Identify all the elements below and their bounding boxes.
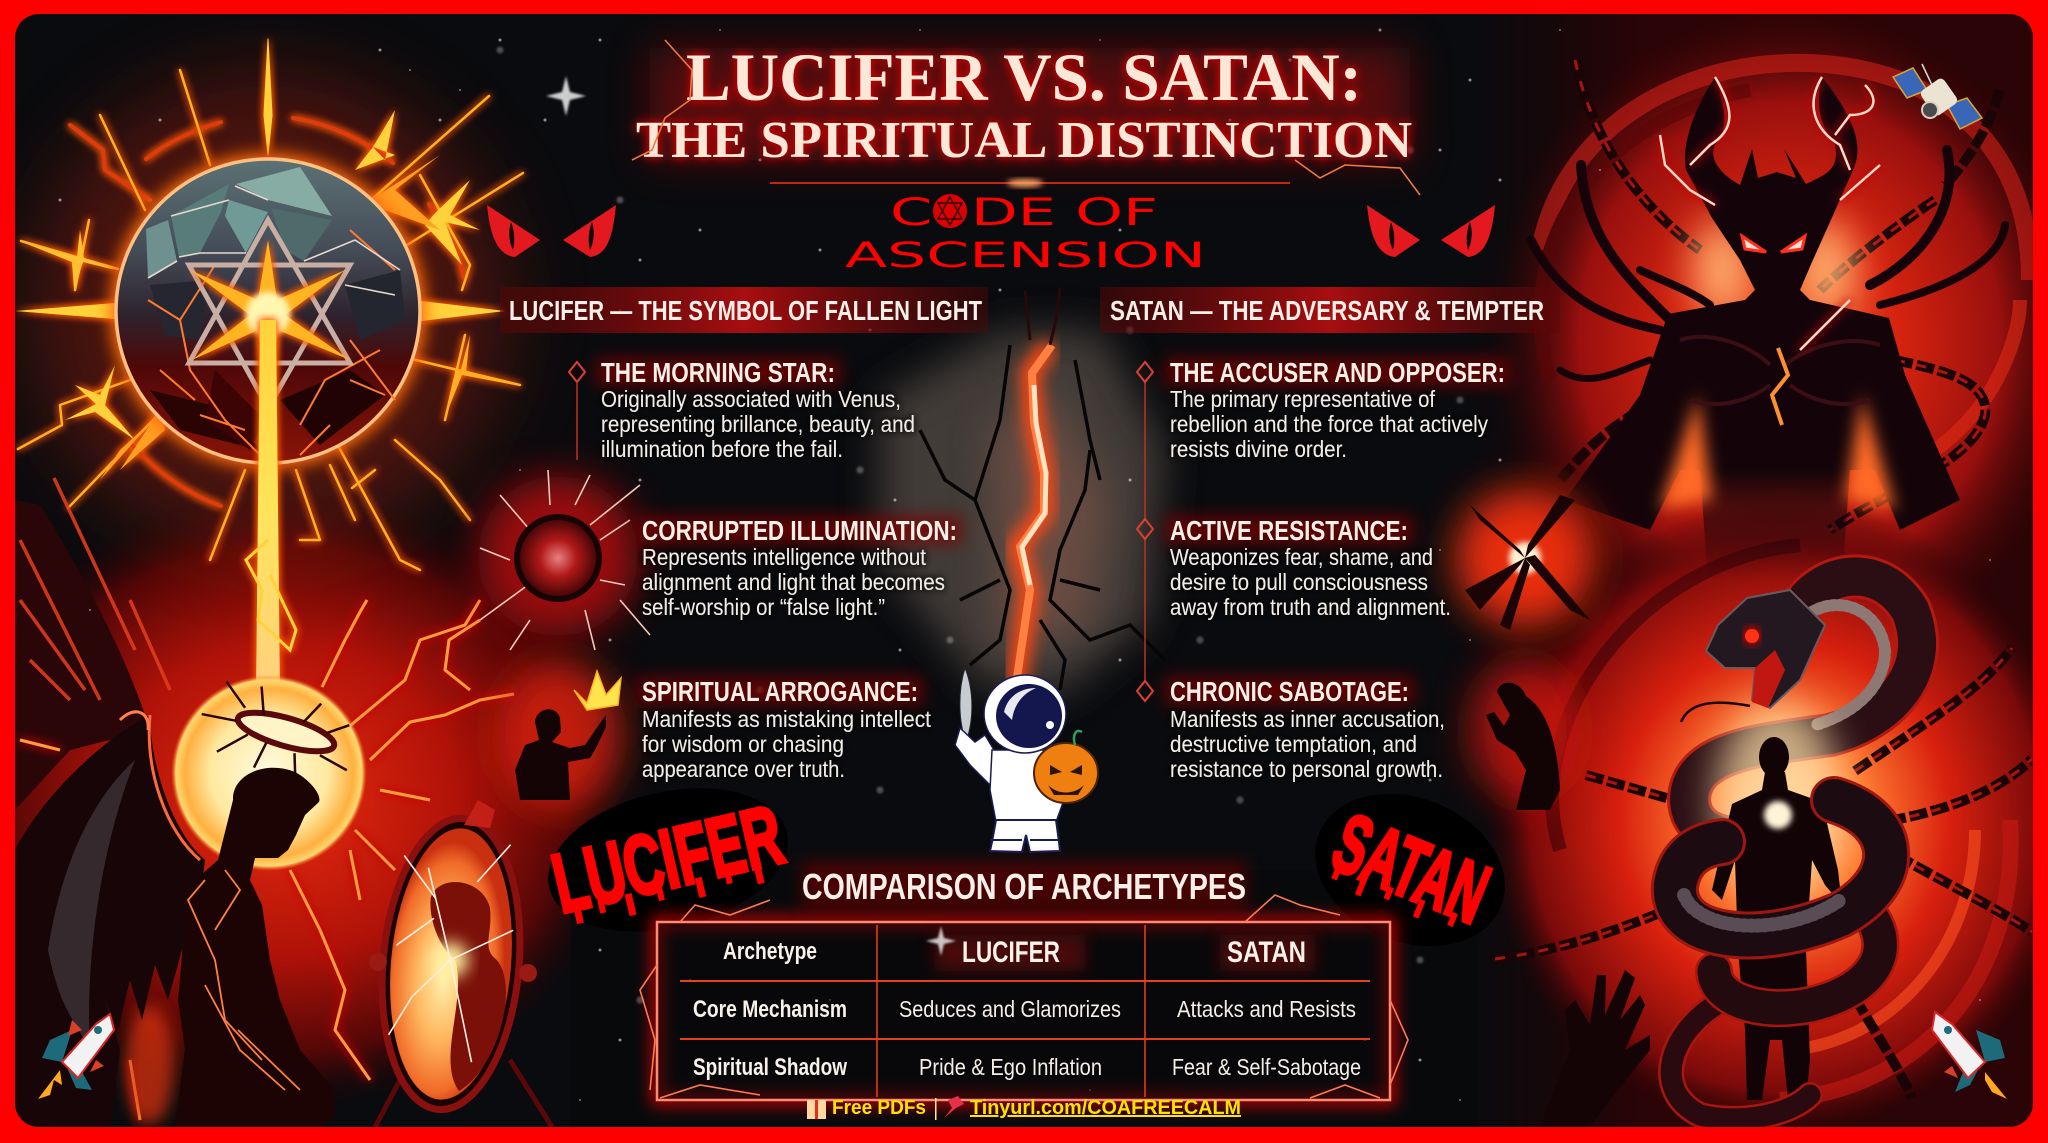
item: chronic sabotage: resistance to personal growth. (1170, 756, 1443, 782)
icon: left devil eyes (487, 205, 616, 257)
footer link: Tinyurl.com/COAFREECALM (970, 1097, 1241, 1119)
panel: lucifer column (500, 287, 988, 782)
icon: glowing halo (171, 675, 367, 871)
item: morning star: Originally associated with Venus, (601, 386, 901, 412)
item: active resistance: ACTIVE RESISTANCE: (1170, 515, 1408, 546)
icon: satellite (1893, 64, 1982, 129)
item: morning star: representing brillance, beauty, and (601, 411, 915, 437)
sticker: satan (1292, 767, 1528, 973)
item: morning star (596, 357, 915, 462)
row: spiritual shadow (693, 1054, 1361, 1081)
icon: golden crown (574, 671, 621, 710)
lower centre dark panel (571, 870, 1477, 1127)
icon: grieving woman silhouette (1470, 658, 1580, 810)
icon: right devil eyes (1367, 205, 1495, 257)
item: morning star: THE MORNING STAR: (601, 357, 835, 388)
icon: angel silhouette (175, 768, 335, 1127)
icon: cracked planet with hexagram (110, 153, 426, 469)
row: header (723, 936, 1306, 969)
icon: radiating lightning (20, 600, 514, 1120)
satan heading bar (1100, 287, 1560, 333)
icon: corrupted illumination orb (478, 470, 650, 650)
icon: starburst (1455, 488, 1595, 630)
row: spiritual shadow: Fear & Self-Sabotage (1172, 1054, 1361, 1080)
row: header: SATAN (1227, 936, 1306, 969)
row: header: LUCIFER (962, 936, 1060, 969)
footer link: Free PDFs (832, 1097, 926, 1119)
item: accuser and opposer: resists divine order. (1170, 436, 1347, 462)
row: header: Archetype (723, 938, 817, 965)
sticker: lucifer: LUCIFER (544, 787, 791, 931)
item: active resistance: Weaponizes fear, shame, and (1170, 544, 1433, 570)
item: active resistance: away from truth and alignment. (1170, 594, 1451, 620)
central stone texture and crack (880, 288, 1165, 695)
icon: diamond marker (569, 362, 585, 460)
icon: title lightning right (1295, 160, 1420, 195)
icon: crown of thorns (201, 681, 350, 773)
icon: demon tendrils (1531, 150, 2005, 379)
item: corrupted illumination: alignment and light that becomes (642, 569, 945, 595)
row: core mechanism: Attacks and Resists (1177, 996, 1356, 1022)
item: spiritual arrogance: SPIRITUAL ARROGANCE: (642, 676, 918, 707)
item: chronic sabotage: CHRONIC SABOTAGE: (1170, 676, 1409, 707)
item: corrupted illumination: Represents intelligence without (642, 544, 927, 570)
icon: jack-o-lantern (1034, 731, 1098, 803)
row: core mechanism: Core Mechanism (693, 996, 847, 1023)
icon: angel wing (15, 712, 205, 1127)
icon: cracked mirror (369, 800, 552, 1127)
item: chronic sabotage: destructive temptation, and (1170, 731, 1417, 757)
logo: code of ascension: C DE OF (890, 191, 1158, 234)
icon: vertical light beam (246, 320, 296, 700)
item: accuser and opposer: rebellion and the force that actively (1170, 411, 1488, 437)
table: comparison (640, 895, 1408, 1100)
left artwork: fallen light (0, 39, 650, 1127)
item: accuser and opposer (1165, 357, 1510, 462)
item: corrupted illumination: self-worship or “false light.” (642, 594, 885, 620)
icon: hexagram (189, 220, 350, 408)
item: spiritual arrogance: appearance over truth. (642, 756, 845, 782)
icon: man reaching for crown (498, 660, 622, 810)
item: corrupted illumination (637, 515, 962, 620)
icon: serpent head (1681, 590, 1825, 722)
panel: satan column (1100, 287, 1560, 782)
icon: reaching hand silhouette (1565, 970, 1650, 1127)
item: chronic sabotage (1165, 676, 1445, 782)
icon: swirl arcs (1540, 63, 2030, 1100)
right artwork: adversary (1455, 0, 2048, 1140)
row: spiritual shadow: Pride & Ego Inflation (919, 1054, 1102, 1080)
sticker: lucifer (534, 766, 802, 954)
item: active resistance (1165, 515, 1451, 620)
icon: pin (944, 1096, 964, 1118)
icon: right rocket (1932, 1012, 2007, 1099)
item: active resistance: desire to pull consciousness (1170, 569, 1428, 595)
row: spiritual shadow: Spiritual Shadow (693, 1054, 847, 1081)
item: corrupted illumination: CORRUPTED ILLUMINATION: (642, 515, 957, 546)
lucifer heading bar (500, 287, 988, 333)
icon: central lava crack (920, 288, 1165, 690)
item: spiritual arrogance: Manifests as mistaking intellect (642, 706, 932, 732)
row: core mechanism: Seduces and Glamorizes (899, 996, 1121, 1022)
sticker: satan: SATAN (1321, 795, 1502, 941)
item: spiritual arrogance (637, 676, 932, 782)
icon: serpent (1671, 576, 1917, 1119)
icon: chains (1495, 60, 2032, 1098)
title (632, 39, 1420, 195)
divider (770, 179, 1290, 187)
icon: sigil (933, 194, 967, 228)
title line 2: THE SPIRITUAL DISTINCTION (636, 112, 1412, 169)
icon: human figure (1712, 700, 1842, 1100)
icon: horned demon silhouette (1565, 77, 1960, 580)
logo: code of ascension (845, 191, 1206, 276)
item: chronic sabotage: Manifests as inner accusation, (1170, 706, 1445, 732)
row: core mechanism (693, 996, 1356, 1023)
icon: gift (807, 1100, 826, 1119)
footer link (807, 1096, 1241, 1120)
item: accuser and opposer: The primary representative of (1170, 386, 1436, 412)
icon: astronaut with pumpkin (955, 668, 1098, 852)
icon: cracked lightning around planet (15, 39, 523, 570)
satan heading bar: SATAN — THE ADVERSARY & TEMPTER (1110, 295, 1544, 326)
item: accuser and opposer: THE ACCUSER AND OPPOSER: (1170, 357, 1505, 388)
item: morning star: illumination before the fail. (601, 436, 843, 462)
icon: table lightning (640, 895, 1408, 1098)
lucifer heading bar: LUCIFER — THE SYMBOL OF FALLEN LIGHT (509, 295, 982, 326)
heading: comparison of archetypes: COMPARISON OF ARCHETYPES (802, 866, 1246, 907)
title line 1: LUCIFER VS. SATAN: (686, 39, 1362, 115)
icon: upper wing (15, 478, 170, 810)
icon: title lightning left (632, 40, 692, 160)
logo: code of ascension: ASCENSION (845, 236, 1206, 276)
icon: left rocket (38, 1014, 114, 1099)
icon: timeline with diamond markers (1137, 362, 1153, 701)
icon: demon glow (1694, 220, 1854, 320)
item: spiritual arrogance: for wisdom or chasing (642, 731, 844, 757)
